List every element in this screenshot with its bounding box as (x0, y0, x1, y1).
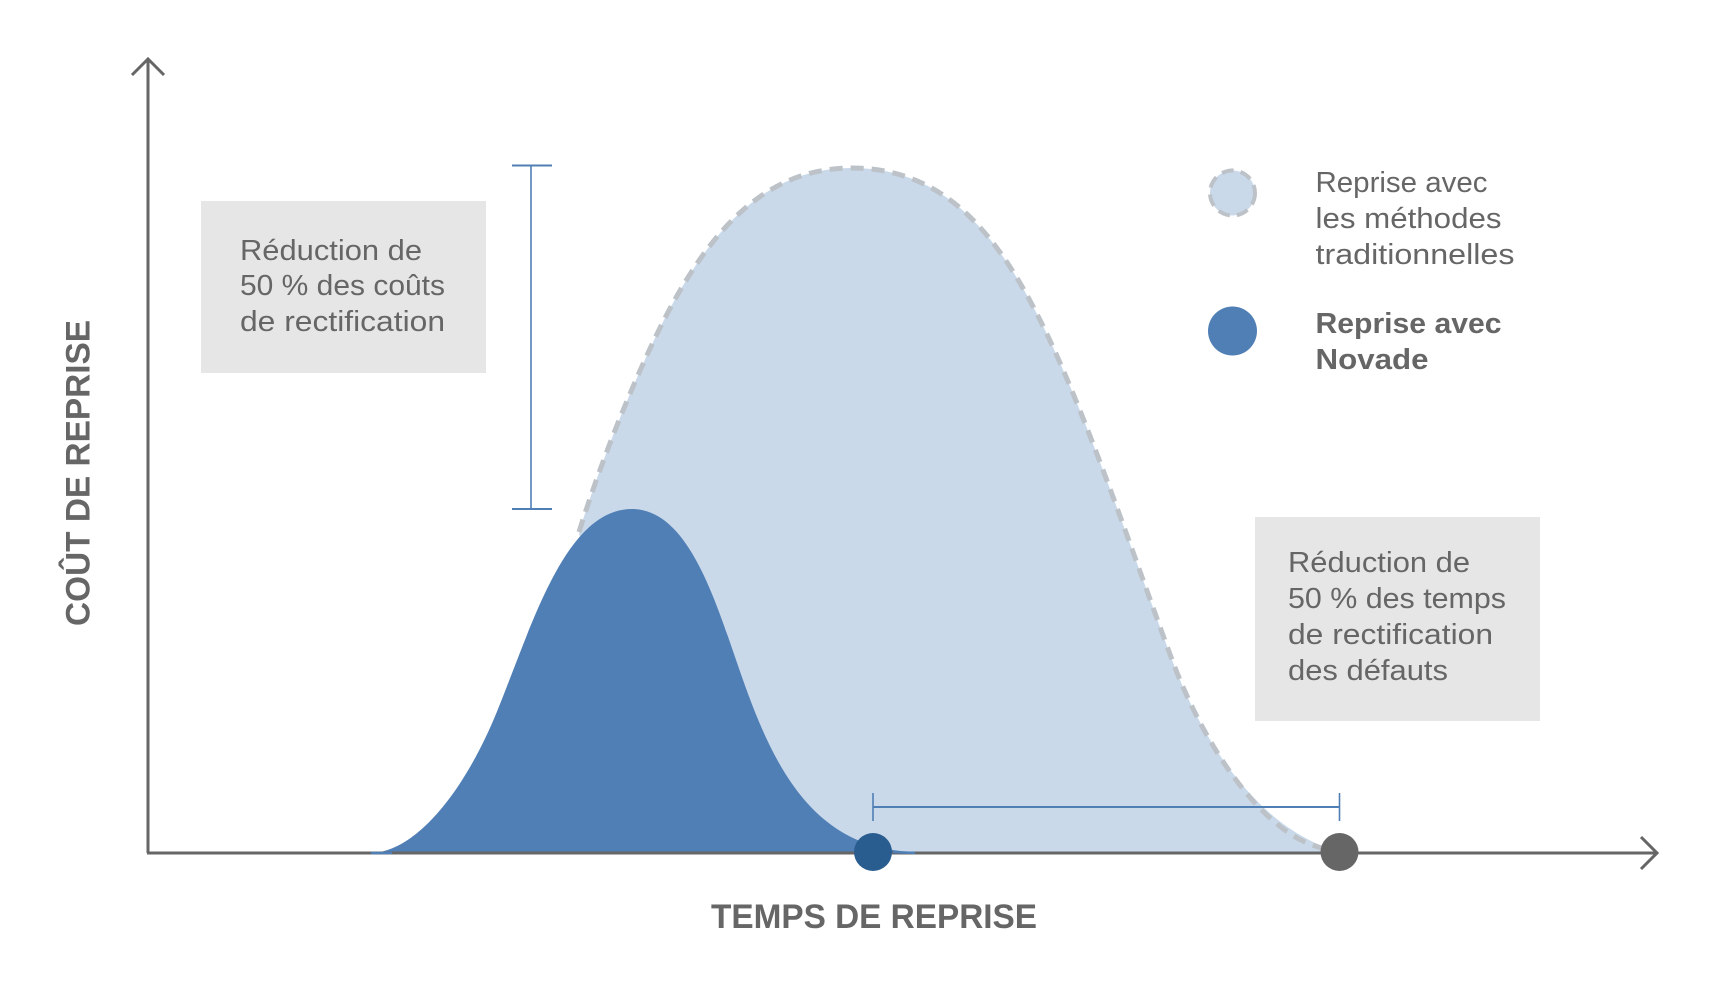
legend: Novade: Reprise avec (1316, 308, 1502, 340)
marker: Novade end point (854, 833, 892, 871)
x axis with arrow (147, 837, 1657, 869)
legend: traditional methods: les méthodes (1316, 203, 1502, 235)
callout: cost reduction: de rectification (240, 306, 445, 338)
bracket: cost reduction (512, 165, 552, 509)
callout: time reduction: Réduction de (1288, 547, 1470, 579)
y axis with arrow (132, 59, 164, 853)
y axis label: COÛT DE REPRISE (58, 320, 98, 626)
marker: traditional end point (1320, 833, 1358, 871)
legend: Novade (1208, 306, 1502, 376)
x axis label: TEMPS DE REPRISE (711, 898, 1037, 936)
area: Novade rework curve (371, 509, 914, 853)
callout: time reduction: 50 % des temps (1288, 583, 1506, 615)
bracket: time reduction (873, 793, 1340, 821)
callout: time reduction: des défauts (1288, 655, 1448, 687)
legend: traditional methods (1210, 167, 1514, 271)
callout: cost reduction: 50 % des coûts (240, 270, 445, 302)
legend: traditional methods: Reprise avec (1316, 167, 1488, 199)
area: traditional rework curve (579, 168, 1345, 853)
legend: Novade: Novade (1316, 344, 1428, 376)
callout: cost reduction: Réduction de (240, 235, 422, 267)
callout: time reduction: de rectification (1288, 619, 1493, 651)
legend: traditional methods: traditionnelles (1316, 239, 1514, 271)
curve tails on the x axis (371, 852, 915, 853)
callout: time reduction (1255, 517, 1540, 721)
callout: cost reduction (201, 201, 486, 373)
